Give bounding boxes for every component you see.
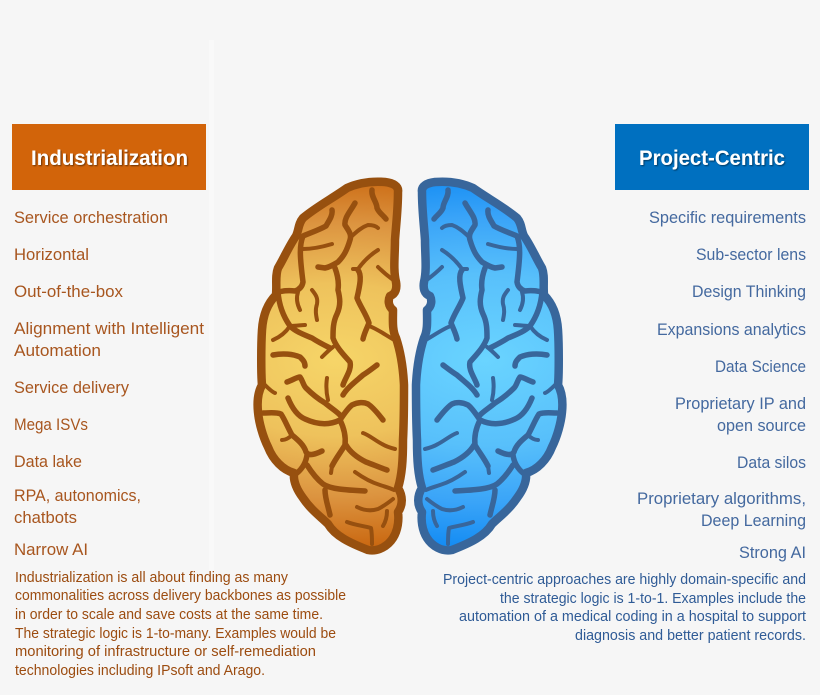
text block: project-centric description: Project-centric approaches are highly domain-specific and xyxy=(443,572,806,588)
text block: project-centric description: automation of a medical coding in a hospital to support xyxy=(459,609,806,625)
list: project-centric traits: Design Thinking xyxy=(692,283,806,301)
text block: project-centric description: diagnosis and better patient records. xyxy=(575,628,806,644)
icon: brain right hemisphere (blue) xyxy=(416,182,562,550)
list: industrialization traits: Alignment with Intelligent xyxy=(14,320,204,338)
text block: industrialization description: commonalities across delivery backbones as possible xyxy=(15,588,346,604)
text block: industrialization description xyxy=(15,570,346,679)
list: project-centric traits: open source xyxy=(717,417,806,435)
text block: project-centric description: the strategic logic is 1-to-1. Examples include the xyxy=(500,591,806,607)
text block: industrialization description: monitoring of infrastructure or self-remediation xyxy=(15,644,316,660)
list: project-centric traits: Proprietary IP and xyxy=(675,395,806,413)
list: project-centric traits: Deep Learning xyxy=(701,512,806,530)
list: industrialization traits: Service delivery xyxy=(14,379,130,397)
list: project-centric traits xyxy=(637,209,806,562)
list: project-centric traits: Proprietary algorithms, xyxy=(637,490,806,508)
list: industrialization traits: Out-of-the-box xyxy=(14,283,124,301)
list: project-centric traits: Data Science xyxy=(715,358,806,376)
list: industrialization traits: RPA, autonomics, xyxy=(14,487,141,505)
header: Industrialization: Industrialization xyxy=(31,147,188,170)
icon: brain left hemisphere (orange) xyxy=(258,182,404,550)
list: industrialization traits xyxy=(14,209,204,559)
list: industrialization traits: Horizontal xyxy=(14,246,89,264)
list: industrialization traits: Narrow AI xyxy=(14,541,88,559)
header: Project-Centric xyxy=(615,124,809,190)
list: project-centric traits: Expansions analytics xyxy=(657,321,806,339)
text block: industrialization description: The strategic logic is 1-to-many. Examples would be xyxy=(15,626,336,642)
header: Industrialization xyxy=(12,124,206,190)
list: project-centric traits: Sub-sector lens xyxy=(696,246,806,264)
text block: industrialization description: in order to scale and save costs at the same time. xyxy=(15,607,323,623)
text block: industrialization description: technologies including IPsoft and Arago. xyxy=(15,663,265,679)
text block: project-centric description xyxy=(443,572,806,644)
list: industrialization traits: Service orchestration xyxy=(14,209,168,227)
list: project-centric traits: Specific requirements xyxy=(649,209,806,227)
list: project-centric traits: Strong AI xyxy=(739,544,806,562)
list: industrialization traits: chatbots xyxy=(14,509,77,527)
list: industrialization traits: Mega ISVs xyxy=(14,416,88,434)
list: project-centric traits: Data silos xyxy=(737,454,806,472)
text block: industrialization description: Industrialization is all about finding as many xyxy=(15,570,289,586)
list: industrialization traits: Data lake xyxy=(14,453,82,471)
header: Project-Centric: Project-Centric xyxy=(639,147,785,170)
list: industrialization traits: Automation xyxy=(14,342,101,360)
